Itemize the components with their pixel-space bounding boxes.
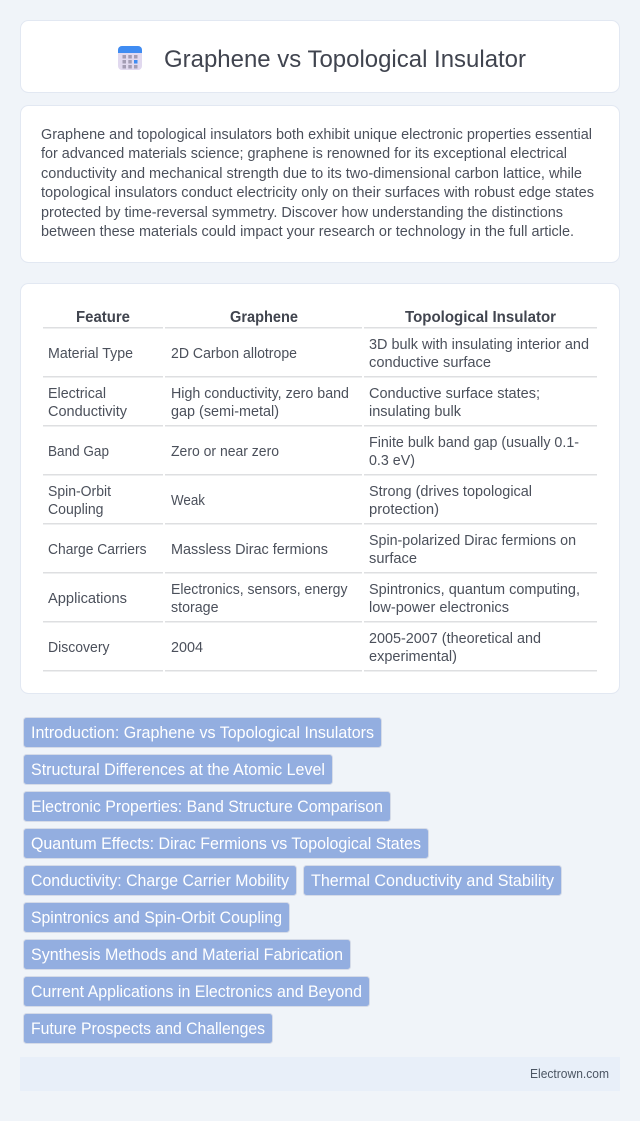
topic: electronic properties: Electronic Properties: Band Structure Comparison xyxy=(31,798,383,816)
topic: structural differences: Structural Differences at the Atomic Level xyxy=(31,761,325,779)
topic: future prospects xyxy=(24,1014,272,1044)
row: charge carriers: Spin-polarized Dirac fermions on xyxy=(369,533,576,549)
row: spin-orbit coupling xyxy=(48,484,532,518)
row: applications: storage xyxy=(171,600,218,616)
topic: thermal conductivity: Thermal Conductivity and Stability xyxy=(311,872,555,890)
row: material type: 3D bulk with insulating interior and xyxy=(369,337,589,353)
topic: synthesis: Synthesis Methods and Material Fabrication xyxy=(31,946,343,964)
row: spin-orbit coupling: Weak xyxy=(171,493,206,509)
row: material type: conductive surface xyxy=(369,355,491,371)
topic: introduction xyxy=(24,718,382,748)
topic: quantum effects xyxy=(24,828,428,858)
topic: synthesis xyxy=(24,940,350,970)
topic links xyxy=(24,718,562,1044)
row: spin-orbit coupling: Spin-Orbit xyxy=(48,484,111,500)
intro paragraph: conductivity and mechanical strength due to its two-dimensional carbon lattice, while xyxy=(41,166,582,182)
intro paragraph: protected by time-reversal symmetry. Discover how understanding the distinctions xyxy=(41,205,563,221)
footer credit: Electrown.com xyxy=(530,1066,609,1081)
row: discovery xyxy=(48,631,541,665)
row: electrical conductivity: High conductivity, zero band xyxy=(171,386,349,402)
topic: spintronics: Spintronics and Spin-Orbit Coupling xyxy=(31,909,282,927)
row: spin-orbit coupling: Strong (drives topological xyxy=(369,484,532,500)
row: discovery: 2004 xyxy=(171,640,203,656)
row: material type xyxy=(48,337,589,371)
row: electrical conductivity xyxy=(48,386,540,420)
row: spin-orbit coupling: Coupling xyxy=(48,502,104,518)
row: band gap: Band Gap xyxy=(48,444,109,460)
topic: current applications: Current Applications in Electronics and Beyond xyxy=(31,983,362,1001)
footer xyxy=(20,1057,620,1091)
table header: Feature xyxy=(76,309,130,326)
topic: spintronics xyxy=(24,902,290,932)
row: applications: low-power electronics xyxy=(369,600,509,616)
row: band gap: 0.3 eV) xyxy=(369,453,415,469)
row: material type: 2D Carbon allotrope xyxy=(171,346,297,362)
intro paragraph xyxy=(41,127,594,240)
topic: conductivity xyxy=(24,866,296,896)
icon: calendar grid xyxy=(118,46,142,70)
header panel xyxy=(20,20,620,92)
row: charge carriers: Charge Carriers xyxy=(48,542,146,558)
intro paragraph: topological insulators conduct electricity only on their surfaces with robust edge states xyxy=(41,185,594,201)
intro paragraph: Graphene and topological insulators both exhibit unique electronic properties essential xyxy=(41,127,592,143)
intro paragraph: between these materials could impact your research or technology in the full article. xyxy=(41,224,574,240)
panel: introduction xyxy=(20,106,620,262)
topic: quantum effects: Quantum Effects: Dirac Fermions vs Topological States xyxy=(31,835,421,853)
row: charge carriers: Massless Dirac fermions xyxy=(171,542,328,558)
topic: future prospects: Future Prospects and Challenges xyxy=(31,1020,265,1038)
row: electrical conductivity: Electrical xyxy=(48,386,106,402)
row: charge carriers xyxy=(48,533,576,567)
row: discovery: experimental) xyxy=(369,649,457,665)
topic: introduction: Introduction: Graphene vs Topological Insulators xyxy=(31,724,374,742)
row: discovery: 2005-2007 (theoretical and xyxy=(369,631,541,647)
row: material type: Material Type xyxy=(48,346,133,362)
row: band gap: Zero or near zero xyxy=(171,444,279,460)
row: spin-orbit coupling: protection) xyxy=(369,502,439,518)
row: applications: Applications xyxy=(48,591,127,607)
row: applications: Spintronics, quantum computing, xyxy=(369,582,580,598)
table header: Graphene xyxy=(230,309,298,326)
topic: structural differences xyxy=(24,754,332,784)
table header xyxy=(76,309,556,326)
intro paragraph: for advanced materials science; graphene is renowned for its exceptional electrical xyxy=(41,146,567,162)
title: Graphene vs Topological Insulator xyxy=(164,46,526,73)
row: applications xyxy=(48,582,580,616)
panel: comparison table xyxy=(20,284,620,694)
row: electrical conductivity: insulating bulk xyxy=(369,404,462,420)
topic: current applications xyxy=(24,976,370,1006)
row: electrical conductivity: Conductive surface states; xyxy=(369,386,540,402)
row: band gap xyxy=(48,435,579,469)
row: applications: Electronics, sensors, energy xyxy=(171,582,348,598)
row: charge carriers: surface xyxy=(369,551,417,567)
topic: electronic properties xyxy=(24,792,390,822)
row: electrical conductivity: Conductivity xyxy=(48,404,128,420)
row: band gap: Finite bulk band gap (usually 0.1- xyxy=(369,435,579,451)
topic: thermal conductivity xyxy=(304,866,562,896)
topic: conductivity: Conductivity: Charge Carrier Mobility xyxy=(31,872,290,890)
row: electrical conductivity: gap (semi-metal) xyxy=(171,404,279,420)
row: discovery: Discovery xyxy=(48,640,110,656)
table header: Topological Insulator xyxy=(405,309,556,326)
